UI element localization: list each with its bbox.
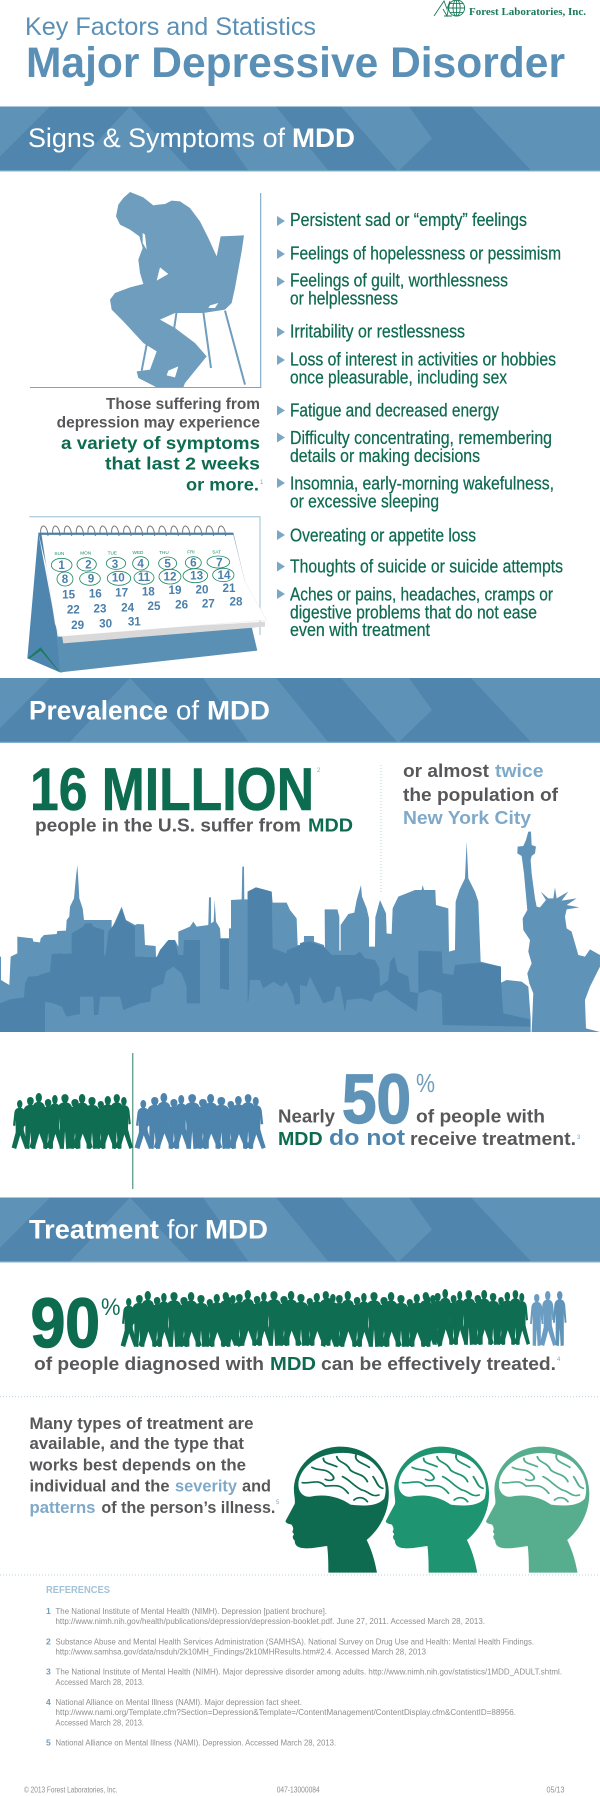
people graphic: half of people untreated	[12, 1093, 266, 1149]
statistic: 50 percent: receive treatment.	[410, 1129, 576, 1149]
callout: New York comparison: or almost	[403, 760, 489, 781]
title: Key Factors and Statistics	[25, 13, 316, 41]
statistic: 90 percent: 90	[31, 1284, 100, 1362]
callout: symptom duration: 1	[260, 480, 264, 486]
text block: types of treatment: individual and the	[30, 1478, 170, 1496]
text block: types of treatment: 5	[276, 1500, 280, 1506]
text block: types of treatment: of the person’s illness.	[101, 1499, 275, 1517]
section band: Signs and Symptoms: MDD	[292, 123, 355, 153]
references: The National Institute of Mental Health (NIMH). Major depressive disorder among adults. http://www.nimh.nih.gov/statistics/1MDD_ADULT.shtml.	[56, 1667, 562, 1677]
calendar illustration: THU	[159, 550, 169, 555]
calendar illustration: 15	[62, 588, 76, 601]
section band: Prevalence: MDD	[207, 695, 270, 725]
title	[25, 13, 565, 87]
callout: symptom duration: or more.	[186, 475, 259, 495]
section band: Signs and Symptoms	[0, 106, 600, 172]
calendar illustration: 17	[115, 586, 128, 599]
calendar illustration: 31	[128, 616, 141, 629]
symptom list: once pleasurable, including sex	[290, 367, 507, 387]
references: The National Institute of Mental Health (NIMH). Depression [patient brochure].	[56, 1606, 327, 1616]
references: Accessed March 28, 2013.	[56, 1717, 144, 1727]
symptom list: Fatigue and decreased energy	[290, 401, 499, 421]
symptom list: Overeating or appetite loss	[290, 525, 476, 545]
calendar illustration: 4	[137, 557, 144, 570]
dotted rules	[0, 1397, 600, 1575]
callout: New York comparison	[403, 760, 559, 828]
text block: types of treatment: works best depends on the	[28, 1457, 246, 1475]
caption: can be effectively treated: MDD	[270, 1354, 316, 1374]
calendar illustration: 2	[85, 558, 92, 571]
symptom list: Insomnia, early-morning wakefulness,	[290, 473, 554, 493]
callout: symptom duration: depression may experience	[57, 415, 260, 432]
references: 1	[46, 1606, 51, 1616]
illustration: seated depressed person	[110, 192, 245, 387]
calendar illustration: 18	[142, 585, 155, 598]
footer	[24, 1785, 565, 1795]
references	[46, 1584, 562, 1747]
references: 4	[46, 1697, 51, 1707]
calendar illustration: 30	[99, 617, 112, 630]
calendar illustration: 3	[112, 558, 119, 571]
statistic: 16 million: people in the U.S. suffer from	[35, 816, 301, 836]
people graphic: ninety percent treated	[121, 1289, 567, 1347]
references: http://www.nimh.nih.gov/health/publications/depression/depression-booklet.pdf. June 27, 2011. Accessed March 28, 2013.	[56, 1616, 485, 1626]
calendar illustration: 14	[217, 569, 231, 582]
calendar illustration: 8	[62, 573, 69, 586]
logo: Forest Laboratories	[434, 0, 586, 18]
section band: Treatment: Treatment	[29, 1215, 159, 1245]
text block: types of treatment: Many types of treatment are	[30, 1415, 253, 1433]
statistic: 90 percent: %	[101, 1294, 120, 1321]
callout: New York comparison: the population of	[403, 784, 559, 805]
calendar illustration: 26	[175, 599, 189, 612]
symptom list: Aches or pains, headaches, cramps or	[290, 585, 553, 605]
calendar illustration: MON	[80, 550, 91, 555]
calendar illustration: SUN	[54, 551, 64, 556]
references: http://www.nami.org/Template.cfm?Section=Depression&Template=/ContentManagement/ContentDisplay.cfm&ContentID=88956.	[56, 1707, 516, 1717]
symptom list: Persistent sad or “empty” feelings	[290, 210, 527, 230]
calendar illustration: 22	[67, 603, 80, 616]
symptom list: digestive problems that do not ease	[290, 602, 537, 622]
footer: 047-13000084	[277, 1785, 320, 1795]
title: Major Depressive Disorder	[26, 39, 565, 87]
calendar illustration: 11	[138, 571, 151, 584]
statistic: 50 percent	[278, 1060, 581, 1150]
symptom list: Thoughts of suicide or suicide attempts	[290, 557, 563, 577]
caption: can be effectively treated: 4	[557, 1357, 561, 1363]
references: National Alliance on Mental Illness (NAMI). Depression. Accessed March 28, 2013.	[56, 1737, 336, 1747]
references: National Alliance on Mental Illness (NAMI). Major depression fact sheet.	[56, 1697, 302, 1707]
caption: can be effectively treated: of people diagnosed with	[34, 1354, 264, 1374]
references: http://www.samhsa.gov/data/nsduh/2k10MH_Findings/2k10MHResults.htm#2.4. Accessed March 28, 2013	[56, 1647, 426, 1657]
symptom list: details or making decisions	[290, 446, 480, 466]
logo: Forest Laboratories: Forest Laboratories, Inc.	[469, 6, 586, 18]
calendar illustration: FRI	[187, 550, 195, 555]
references: Accessed March 28, 2013.	[56, 1677, 144, 1687]
symptom list: Feelings of guilt, worthlessness	[290, 271, 508, 291]
statistic: 50 percent: of people with	[416, 1107, 545, 1127]
text block: types of treatment	[28, 1415, 280, 1517]
section band: Prevalence	[0, 678, 600, 743]
statistic: 16 million: 2	[317, 768, 321, 774]
references: 2	[46, 1637, 51, 1647]
statistic: 50 percent: MDD	[278, 1129, 323, 1149]
caption: can be effectively treated: can be effectively treated.	[321, 1354, 556, 1374]
symptom list: Irritability or restlessness	[290, 322, 465, 342]
text block: types of treatment: patterns	[30, 1499, 96, 1517]
callout: symptom duration: a variety of symptoms	[61, 433, 260, 453]
calendar illustration: 20	[195, 583, 208, 596]
symptom list: even with treatment	[290, 620, 430, 640]
footer: © 2013 Forest Laboratories, Inc.	[24, 1785, 118, 1795]
calendar illustration: TUE	[108, 550, 117, 555]
section band: Prevalence: of	[176, 695, 199, 725]
references: Substance Abuse and Mental Health Services Administration (SAMHSA). National Survey on Drug Use and Health: Mental Health Findings.	[56, 1637, 534, 1647]
text block: types of treatment: and	[242, 1478, 271, 1496]
illustration: New York skyline and Statue of Liberty, right half	[300, 832, 600, 1032]
calendar illustration: 6	[190, 557, 197, 570]
symptom list: or helplessness	[290, 288, 398, 308]
calendar illustration: 12	[164, 571, 177, 584]
calendar illustration: 23	[94, 603, 107, 616]
calendar illustration: 13	[190, 570, 204, 583]
callout: symptom duration: Those suffering from	[106, 396, 260, 413]
calendar illustration: 28	[229, 596, 243, 609]
references: 3	[46, 1667, 51, 1677]
section band: Treatment	[0, 1198, 600, 1262]
symptom list	[277, 210, 563, 640]
statistic: 50 percent: 50	[342, 1060, 411, 1138]
illustration: three heads with brains	[285, 1447, 589, 1573]
symptom list: Loss of interest in activities or hobbies	[290, 349, 556, 369]
illustration: New York skyline, left half	[0, 865, 301, 1032]
footer: 05/13	[546, 1785, 565, 1795]
vertical divider through crowd	[132, 1053, 134, 1189]
symptom list: Difficulty concentrating, remembering	[290, 428, 552, 448]
references: REFERENCES	[46, 1584, 110, 1596]
statistic: 50 percent: %	[416, 1068, 435, 1098]
statistic: 16 million: 16 MILLION	[30, 756, 314, 823]
calendar illustration: 1	[58, 559, 65, 572]
callout: New York comparison: twice	[495, 760, 544, 781]
section band: Signs and Symptoms: Signs & Symptoms of	[28, 123, 285, 153]
statistic: 50 percent: 3	[577, 1135, 581, 1141]
text block: types of treatment: severity	[175, 1478, 238, 1496]
section band: Treatment: MDD	[205, 1215, 268, 1245]
calendar illustration: 10	[112, 572, 125, 585]
calendar illustration	[27, 517, 267, 672]
calendar illustration: 25	[148, 600, 161, 613]
frame line around illustration	[30, 193, 261, 388]
calendar illustration: 7	[216, 557, 223, 570]
section band: Prevalence: Prevalence	[29, 695, 168, 725]
calendar illustration: 19	[169, 584, 182, 597]
calendar illustration: 16	[89, 587, 102, 600]
callout: symptom duration	[57, 396, 264, 495]
caption: can be effectively treated	[34, 1354, 561, 1374]
calendar illustration: 27	[202, 597, 215, 610]
calendar illustration: 21	[222, 582, 236, 595]
statistic: 50 percent: do not	[329, 1125, 406, 1150]
calendar illustration: 5	[164, 557, 171, 570]
calendar illustration: WED	[133, 550, 144, 555]
symptom list: or excessive sleeping	[290, 491, 439, 511]
dotted divider	[380, 765, 382, 893]
section band: Treatment: for	[167, 1215, 198, 1245]
callout: New York comparison: New York City	[403, 807, 532, 828]
references: 5	[46, 1737, 51, 1747]
statistic: 16 million: MDD	[308, 816, 353, 836]
calendar illustration: 29	[71, 619, 85, 632]
calendar illustration: 24	[121, 601, 135, 614]
statistic: 50 percent: Nearly	[278, 1107, 335, 1127]
callout: symptom duration: that last 2 weeks	[105, 453, 260, 473]
symptom list: Feelings of hopelessness or pessimism	[290, 243, 561, 263]
calendar illustration: 9	[88, 572, 95, 585]
calendar illustration: SAT	[212, 549, 221, 554]
text block: types of treatment: available, and the type that	[30, 1435, 245, 1453]
